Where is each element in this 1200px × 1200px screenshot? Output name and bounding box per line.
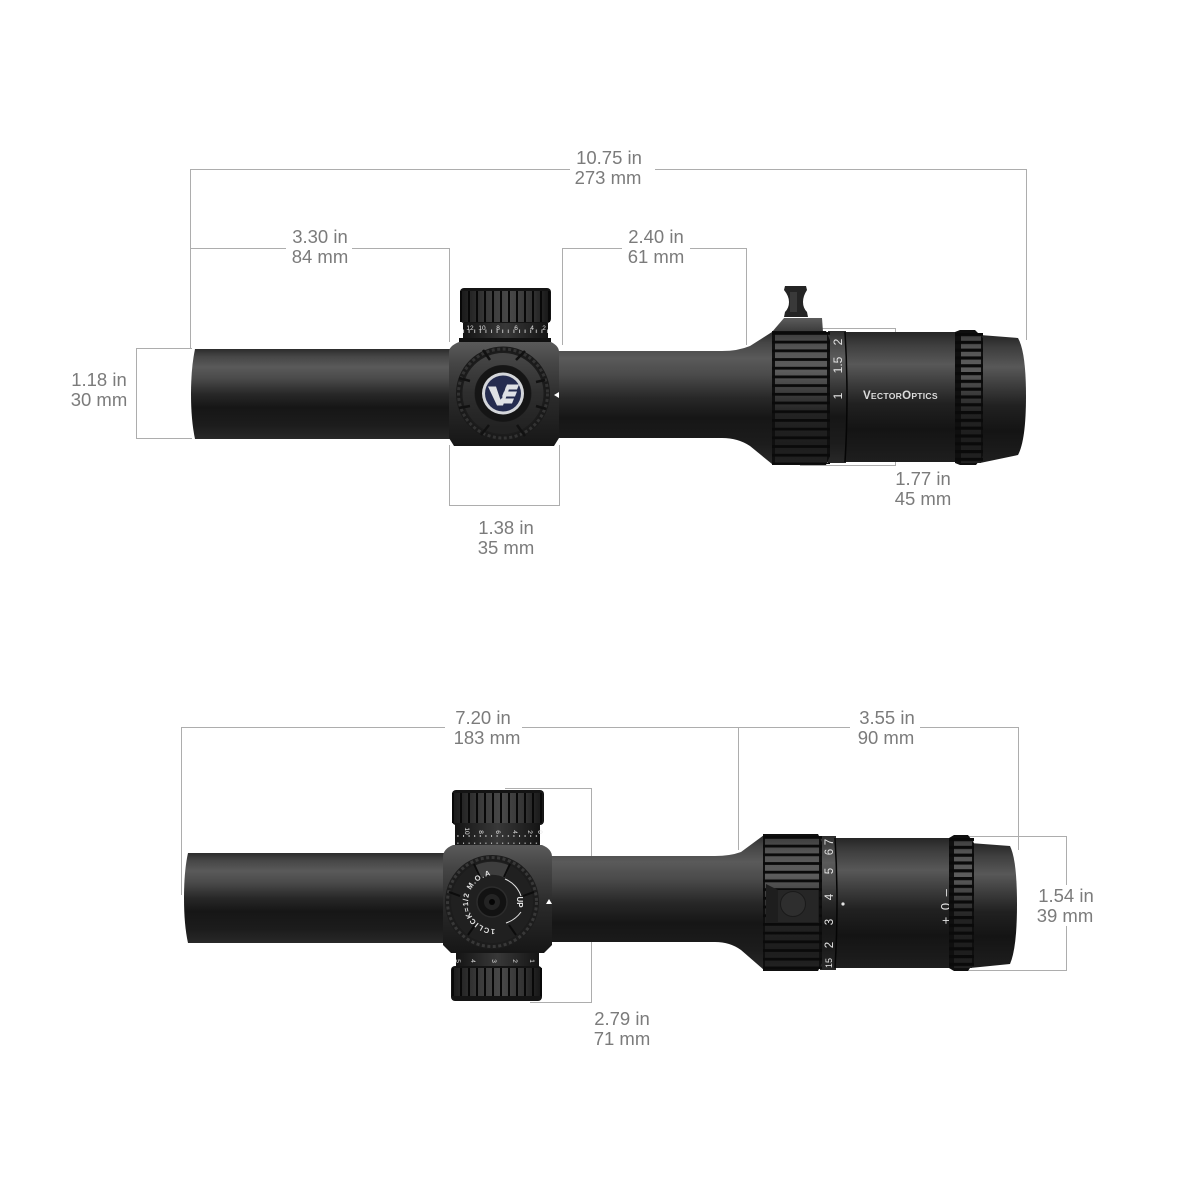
- label: turret height: 71 mm: [594, 1028, 650, 1049]
- magnification scale: 5: [824, 868, 836, 874]
- label: front section: 183 mm: [454, 727, 520, 748]
- magnification scale: 6: [824, 849, 836, 855]
- label: overall length: [575, 147, 642, 188]
- elevation turret: 4: [530, 325, 534, 332]
- label: turret to ring: 2.40 in: [628, 226, 684, 247]
- index mark: [546, 899, 552, 904]
- index dot: [841, 902, 845, 906]
- label: ring diameter: 1.77 in: [895, 468, 951, 489]
- saddle: [443, 845, 552, 953]
- magnification scale: 1.5: [831, 356, 845, 373]
- label: rear section: 3.55 in: [859, 707, 915, 728]
- brand name: VECTOROPTICS: [863, 390, 938, 402]
- dial with click markings: [445, 855, 539, 948]
- magnification scale: 2: [831, 338, 845, 345]
- elevation turret: 4: [511, 830, 518, 834]
- magnification scale: [820, 836, 837, 970]
- elevation turret: 2: [526, 830, 533, 834]
- label: ring diameter: [895, 468, 951, 509]
- elevation turret: 2: [542, 325, 546, 332]
- magnification scale: [828, 331, 847, 463]
- label: turret to ring: [628, 226, 684, 267]
- magnification scale: 3: [824, 919, 836, 925]
- rear tube and flare: [548, 835, 764, 970]
- saddle: [449, 342, 559, 446]
- windage turret: 5: [454, 959, 461, 963]
- label: rear section: 90 mm: [858, 727, 914, 748]
- label: tube diameter: 30 mm: [71, 389, 127, 410]
- label: tube diameter: 1.18 in: [71, 369, 127, 390]
- magnification scale: 7: [824, 839, 836, 845]
- windage turret: 1: [528, 959, 535, 963]
- throw lever switch: [766, 884, 819, 923]
- magnification ring: [772, 331, 830, 465]
- index mark: [554, 392, 559, 398]
- front tube: [191, 349, 452, 439]
- magnification scale: 2: [824, 942, 836, 948]
- elevation turret: 10: [478, 325, 486, 332]
- dial with click markings: UP: [515, 896, 524, 908]
- magnification scale: 15: [824, 958, 834, 968]
- eyepiece: [980, 335, 1026, 463]
- diopter ring: [955, 330, 983, 465]
- elevation turret: 10: [463, 827, 470, 835]
- label: objective to turret: 84 mm: [292, 246, 348, 267]
- label: turret height: [594, 1008, 650, 1049]
- dial with click markings: 1CLICK=1/2 M.O.A: [462, 870, 495, 934]
- magnification scale: 1: [831, 392, 845, 399]
- eyepiece: [970, 843, 1017, 968]
- elevation turret: [452, 790, 544, 845]
- label: rear section: [858, 707, 915, 748]
- magnification ring: [763, 834, 822, 971]
- elevation turret: 6: [494, 830, 501, 834]
- elevation turret: 8: [477, 830, 484, 834]
- label: eyepiece diameter: [1037, 885, 1094, 926]
- scope: side view: [191, 286, 1026, 465]
- windage dial with logo: [456, 346, 550, 440]
- front tube: [184, 853, 446, 943]
- elevation turret: [459, 288, 551, 343]
- diopter markings: + 0 –: [938, 888, 953, 924]
- label: front section: 7.20 in: [455, 707, 511, 728]
- label: saddle width: 1.38 in: [478, 517, 534, 538]
- label: objective to turret: [292, 226, 348, 267]
- label: saddle width: [478, 517, 534, 558]
- windage turret: [451, 953, 542, 1001]
- rear tube and flare: [556, 332, 772, 464]
- label: objective to turret: 3.30 in: [292, 226, 348, 247]
- main body: [826, 332, 956, 462]
- label: ring diameter: 45 mm: [895, 488, 951, 509]
- label: saddle width: 35 mm: [478, 537, 534, 558]
- windage turret: 4: [469, 959, 476, 963]
- label: turret height: 2.79 in: [594, 1008, 650, 1029]
- throw lever: [772, 286, 823, 332]
- label: turret to ring: 61 mm: [628, 246, 684, 267]
- label: overall length: 10.75 in: [576, 147, 642, 168]
- label: eyepiece diameter: 1.54 in: [1038, 885, 1094, 906]
- label: tube diameter: [71, 369, 127, 410]
- dimension lines: bottom scope: [182, 727, 1066, 1002]
- label: overall length: 273 mm: [575, 167, 641, 188]
- diopter ring: [949, 835, 974, 971]
- elevation turret: 6: [514, 325, 518, 332]
- magnification scale: 4: [824, 893, 836, 900]
- label: front section: [454, 707, 520, 748]
- windage turret: 2: [511, 959, 518, 963]
- main body: [818, 838, 952, 968]
- scope: top view: [184, 790, 1017, 1001]
- elevation turret: 8: [496, 325, 500, 332]
- windage turret: 3: [490, 959, 497, 963]
- dimension lines: top scope: [136, 170, 1026, 506]
- elevation turret: 0: [536, 830, 543, 834]
- label: eyepiece diameter: 39 mm: [1037, 905, 1093, 926]
- elevation turret: 12: [466, 325, 474, 332]
